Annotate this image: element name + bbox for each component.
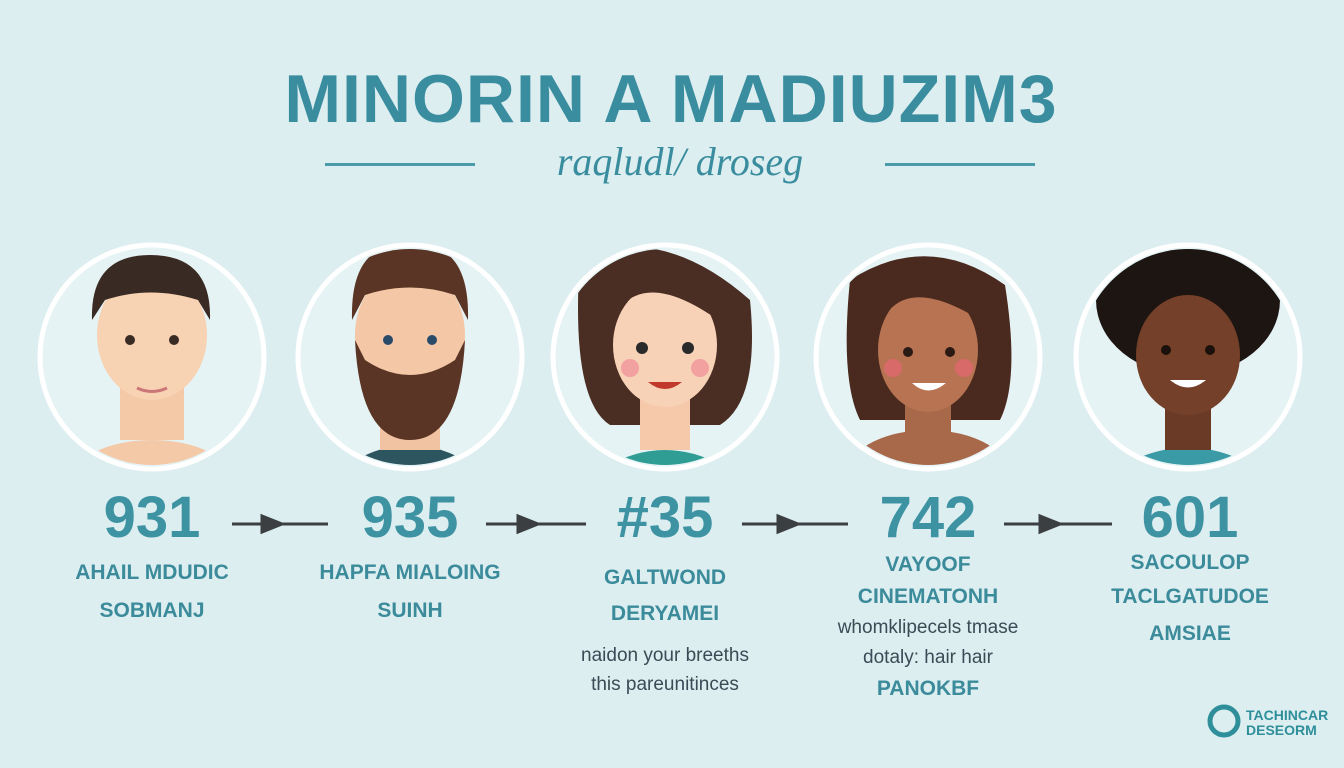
- logo text: [1246, 707, 1328, 738]
- text: 935: [362, 485, 458, 550]
- text: dotaly: hair hair: [863, 647, 993, 668]
- text: this pareunitinces: [591, 674, 739, 695]
- text: SACOULOP: [1130, 551, 1250, 574]
- portrait 3: [553, 245, 777, 470]
- text: GALTWOND: [604, 566, 726, 589]
- portraits: [38, 242, 1302, 738]
- column 3 text: [581, 485, 749, 695]
- arrows: [232, 516, 1112, 532]
- text: 742: [880, 485, 976, 550]
- column 5 text: [1111, 485, 1269, 645]
- text: DERYAMEI: [611, 602, 719, 625]
- portrait 2: [298, 245, 522, 470]
- text: SUINH: [377, 599, 443, 622]
- column 2 text: [319, 485, 501, 622]
- text: VAYOOF: [885, 553, 971, 576]
- portrait 5: [1076, 225, 1300, 470]
- text: HAPFA MIALOING: [319, 561, 501, 584]
- subtitle: [325, 139, 1035, 184]
- title: MINORIN A MADIUZIM3: [284, 61, 1058, 137]
- text: AHAIL MDUDIC: [75, 561, 229, 584]
- logo text: TACHINCAR: [1246, 707, 1328, 723]
- text: 601: [1142, 485, 1238, 550]
- portrait 4: [814, 242, 1042, 472]
- text: CINEMATONH: [858, 585, 998, 608]
- column 4 text: [838, 485, 1018, 700]
- text: PANOKBF: [877, 677, 979, 700]
- logo icon: [1210, 707, 1238, 735]
- text: naidon your breeths: [581, 645, 749, 666]
- text: 931: [104, 485, 200, 550]
- logo text: DESEORM: [1246, 722, 1317, 738]
- text: TACLGATUDOE: [1111, 585, 1269, 608]
- portrait 1: [38, 242, 266, 472]
- text: whomklipecels tmase: [838, 617, 1018, 638]
- text: AMSIAE: [1149, 622, 1231, 645]
- subtitle: raqludl/ droseg: [557, 139, 803, 184]
- text: #35: [617, 485, 713, 550]
- text: SOBMANJ: [99, 599, 205, 622]
- column 1 text: [75, 485, 229, 622]
